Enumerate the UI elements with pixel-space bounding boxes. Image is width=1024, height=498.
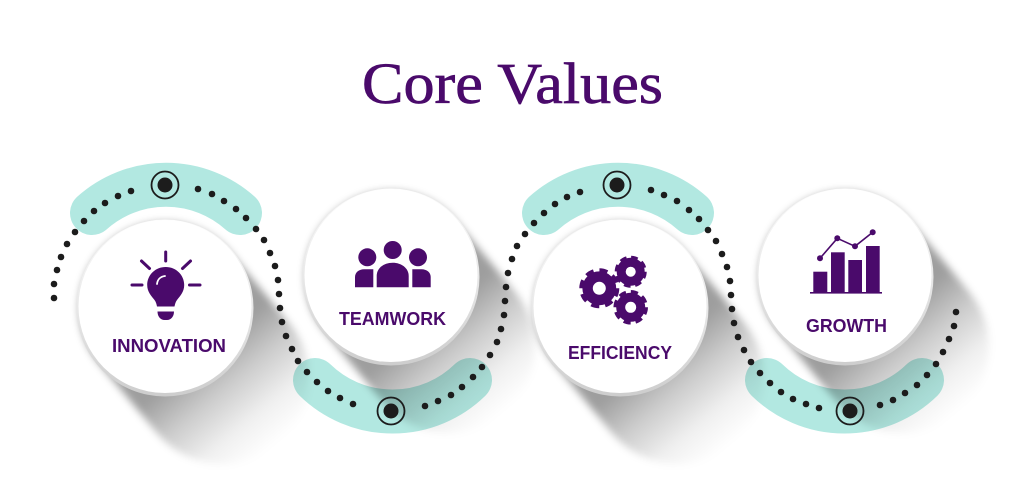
label: growth: GROWTH bbox=[806, 316, 887, 336]
panel: efficiency bbox=[532, 220, 708, 396]
dotted path bbox=[51, 186, 959, 411]
panel: teamwork bbox=[302, 188, 480, 366]
label: innovation: INNOVATION bbox=[112, 336, 226, 356]
label: efficiency: EFFICIENCY bbox=[568, 343, 672, 363]
icon: team bbox=[355, 241, 431, 287]
icon: gears bbox=[583, 259, 645, 321]
panel: growth bbox=[756, 188, 934, 366]
title: Core Values bbox=[362, 51, 663, 116]
icon: growth chart bbox=[810, 229, 882, 294]
panel: innovation bbox=[76, 220, 254, 396]
long shadows bbox=[165, 277, 903, 378]
label: teamwork: TEAMWORK bbox=[339, 309, 446, 329]
teal arc bands bbox=[92, 185, 922, 412]
icon: light bulb bbox=[132, 252, 200, 320]
target markers bbox=[152, 172, 864, 424]
